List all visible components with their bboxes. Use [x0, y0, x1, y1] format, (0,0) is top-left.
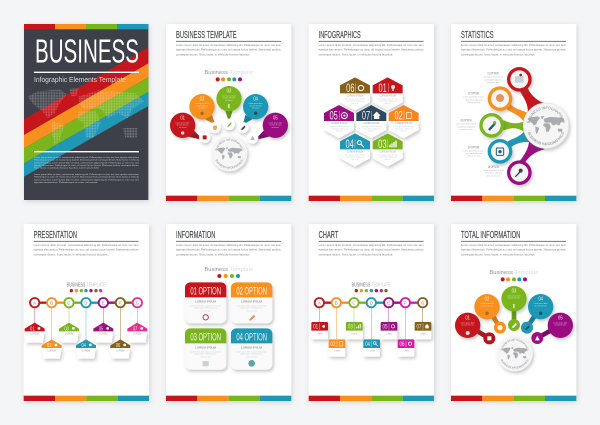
ring 01 — [507, 67, 532, 92]
chart subtitle: Business Template — [489, 270, 538, 276]
option card 04: adipiscing elit. Pellentesque ac — [240, 353, 263, 356]
tag 05 — [381, 322, 397, 339]
cover body text: rhoncus faucibus. Lorem ipsum dolor sit amet, consectetuer adipiscing elit. Pellentesque ac nunc nec sem — [34, 161, 139, 164]
hexagon 06: 06 — [346, 81, 355, 95]
label 01: 01 OPTION — [487, 72, 499, 76]
option card 03: nunc nec sem — [201, 356, 211, 358]
intro text — [461, 243, 566, 256]
node letters: F — [119, 300, 122, 305]
card 01: 01 — [30, 326, 35, 332]
panel: chart — [309, 224, 434, 401]
node letters — [33, 300, 140, 305]
hexagon 06: consectetuer adipiscing — [346, 100, 364, 103]
bubble 04: 04 — [253, 96, 258, 102]
intro text: egestas elementum. Pellentesque ac nunc vel massa luctus laoreet. Maecenas pretium — [34, 248, 139, 252]
card 07: LOREM — [133, 334, 142, 336]
hexagon 02: elit nunc — [401, 130, 407, 133]
node letters: A — [33, 300, 36, 305]
label 03: Lorem ipsum dolor sit amet — [456, 123, 477, 126]
intro text: egestas elementum. Pellentesque ac nunc vel massa luctus laoreet. Maecenas pretium — [176, 48, 281, 52]
bottom colour bar — [24, 396, 149, 401]
centre globe circle — [211, 136, 250, 175]
timeline nodes — [30, 298, 142, 307]
cover body text: Lorem ipsum dolor sit amet, consectetuer adipiscing elit. Pellentesque ac nunc nec sem egestas elementum — [34, 156, 139, 159]
tag 06: LOREM — [403, 351, 410, 353]
card 04: LOREM — [82, 350, 90, 352]
ring 02 — [488, 86, 512, 111]
hexagon 07: elit nunc — [368, 130, 375, 133]
hexagon 01: consectetuer adipiscing — [379, 100, 396, 103]
blob 03: sit amet elit nunc — [508, 297, 520, 300]
tag 07: 07 — [416, 324, 422, 331]
card 07: 07 — [133, 326, 137, 332]
bottom colour bar — [166, 196, 291, 201]
ring 04 — [488, 139, 512, 164]
node letters: A — [318, 300, 321, 305]
blob 02 — [474, 294, 506, 334]
bubble 05: Lorem ipsum dolor — [268, 122, 283, 124]
label 02: consectetuer adipiscing — [465, 98, 482, 101]
option card 04: nunc nec sem — [247, 356, 257, 358]
option card 04: Lorem ipsum dolor sit amet, consectetuer — [236, 350, 267, 353]
bubble 01: Lorem ipsum dolor — [176, 122, 190, 124]
panel: infographics — [309, 24, 434, 201]
bubble 02: Lorem ipsum dolor — [195, 103, 209, 105]
node letters: D — [84, 300, 88, 305]
bubble 01: sit amet elit nunc — [176, 124, 189, 127]
cover body text: Pellentesque ac nunc vel massa luctus laoreet. Maecenas pretium consequat dictum. Nunc factor, in vehicula — [34, 176, 140, 179]
intro text: Lorem ipsum dolor sit amet, consectetuer adipiscing elit. Pellentesque ac nunc nec sem — [319, 243, 424, 247]
hexagon 02: Lorem ipsum dolor sit amet — [394, 125, 414, 128]
connectors — [503, 86, 545, 162]
intro text: consequat dictum. Nunc factor, in vehicula rhoncus faucibus. — [34, 252, 108, 256]
hexagon 05: elit nunc — [336, 130, 342, 133]
node letters: B — [335, 300, 338, 305]
bottom colour bar — [451, 396, 576, 401]
panel: statistics — [450, 24, 579, 204]
blob 03: 03 — [512, 289, 516, 295]
option card 01: nunc nec sem — [201, 310, 211, 312]
icon nodes — [199, 119, 258, 144]
bubble 02: 02 — [200, 96, 204, 102]
option card 02: Lorem ipsum dolor sit amet, consectetuer — [236, 304, 267, 307]
tag 03 — [346, 322, 363, 339]
label 05: Lorem ipsum dolor sit amet — [483, 169, 504, 172]
node letters: G — [421, 300, 425, 305]
option card 01: 01 OPTION — [190, 285, 221, 297]
tag 06: 06 — [399, 341, 405, 348]
centre globe circle: BUSINESS INFOGRAPHICS — [500, 338, 529, 350]
hexagon 01: LOREM IPSUM — [380, 95, 396, 97]
label 01: Lorem ipsum dolor sit amet — [483, 76, 504, 79]
hexagon 02: consectetuer adipiscing — [395, 127, 412, 130]
intro text — [34, 243, 139, 256]
cover body text: rhoncus faucibus. Lorem ipsum dolor sit amet, consectetuer adipiscing elit. Pellentesque ac nunc nec sem — [34, 178, 139, 181]
option card 03: adipiscing elit. Pellentesque ac — [194, 353, 217, 356]
hexagon 04: elit nunc — [352, 158, 358, 161]
tag 01: LOREM — [317, 333, 323, 335]
option card 01: adipiscing elit. Pellentesque ac — [194, 307, 217, 310]
label 04: 04 OPTION — [468, 145, 480, 149]
tag 05: 05 — [382, 324, 388, 331]
hexagon 06 — [340, 77, 370, 111]
ring 03 — [479, 113, 504, 138]
intro text — [461, 43, 566, 56]
panel: business template — [165, 24, 294, 204]
hexagon 01: 01 — [378, 81, 387, 95]
cover body text: Pellentesque ac nunc vel massa luctus laoreet. Maecenas pretium consequat dictum. Nunc factor, in vehicula — [34, 159, 140, 162]
tag 04 — [363, 339, 380, 357]
intro text: egestas elementum. Pellentesque ac nunc vel massa luctus laoreet. Maecenas pretium — [319, 48, 424, 52]
legend dots — [216, 77, 242, 81]
chart subtitle: Business Template — [204, 267, 253, 273]
tag 02: LOREM — [334, 351, 341, 353]
hexagon 01 — [373, 77, 403, 111]
card 02: LOREM — [48, 350, 56, 352]
panel: business cover — [24, 24, 148, 200]
timeline nodes — [315, 298, 427, 307]
tag 04: 04 — [365, 341, 370, 348]
card 04 — [76, 339, 96, 359]
intro text: egestas elementum. Pellentesque ac nunc vel massa luctus laoreet. Maecenas pretium — [319, 248, 424, 252]
intro text: Lorem ipsum dolor sit amet, consectetuer adipiscing elit. Pellentesque ac nunc nec sem — [176, 243, 281, 247]
card 03: LOREM — [65, 334, 73, 336]
bubble 03 — [216, 86, 242, 119]
panel: total information — [450, 224, 579, 404]
top colour bar — [24, 24, 148, 29]
intro text: consequat dictum. Nunc factor, in vehicula rhoncus faucibus. — [176, 52, 250, 56]
chart subtitle: BUSINESS TEMPLATE — [352, 283, 391, 289]
heading: INFOGRAPHICS — [319, 30, 361, 41]
hexagon 03: elit nunc — [385, 158, 391, 161]
tag 07: LOREM — [420, 333, 427, 335]
diagonal colour stripes — [24, 47, 148, 177]
heading: CHART — [319, 230, 338, 241]
label 03: elit nunc nec sem — [460, 128, 473, 131]
hexagon 01: Lorem ipsum dolor sit amet — [378, 97, 398, 100]
bottom colour bar — [451, 196, 576, 201]
hexagon 05: LOREM IPSUM — [331, 123, 347, 125]
bottom colour bar — [166, 396, 291, 401]
hexagon 06: Lorem ipsum dolor sit amet — [345, 97, 366, 100]
option card 04: 04 OPTION — [236, 331, 267, 343]
bubble 04 — [243, 94, 268, 123]
label 02: Lorem ipsum dolor sit amet — [464, 96, 484, 99]
blob 04: Lorem ipsum dolor — [534, 303, 548, 305]
hexagon 04 — [340, 133, 370, 167]
hexagon 04: 04 — [345, 137, 354, 151]
bubble 03: sit amet elit nunc — [223, 97, 235, 100]
option card 04 — [231, 328, 272, 370]
bubble 04: vel massa — [252, 108, 259, 110]
heading: BUSINESS TEMPLATE — [176, 30, 237, 41]
intro text: consequat dictum. Nunc factor, in vehicula rhoncus faucibus. — [319, 252, 393, 256]
centre globe circle: BUSINESS INFOGRAPHICS — [215, 138, 244, 150]
blob 05: 05 — [558, 315, 563, 321]
hexagon 05: consectetuer adipiscing — [330, 127, 348, 130]
timeline connectors — [35, 303, 137, 340]
label 04 — [464, 145, 484, 158]
cover body text — [34, 156, 140, 184]
card 02: 02 — [47, 343, 52, 349]
blob 01 — [455, 313, 495, 344]
intro text — [319, 43, 424, 56]
option card 01: LOREM IPSUM — [195, 299, 217, 303]
bubble 03: Lorem ipsum dolor — [222, 95, 236, 97]
legend dots — [355, 289, 388, 292]
label 03: consectetuer adipiscing — [457, 125, 475, 128]
intro text — [176, 243, 281, 256]
label 05 — [483, 165, 504, 177]
bubble 01: 01 — [180, 115, 185, 121]
heading: STATISTICS — [461, 30, 494, 41]
bubble 05: vel massa — [272, 127, 279, 129]
label 04: Lorem ipsum dolor sit amet — [464, 149, 484, 152]
blob 01: 01 — [465, 315, 470, 321]
label 02: 02 OPTION — [468, 92, 480, 96]
label 01 — [483, 72, 504, 84]
intro text: consequat dictum. Nunc factor, in vehicula rhoncus faucibus. — [319, 52, 393, 56]
card 05: 05 — [99, 326, 103, 332]
hexagon 04: consectetuer adipiscing — [346, 156, 364, 159]
hexagon 02: LOREM IPSUM — [396, 123, 412, 125]
option card 01 — [185, 282, 226, 323]
tag 02 — [329, 339, 345, 357]
option card 03: LOREM IPSUM — [195, 345, 217, 349]
panel: information — [166, 224, 291, 401]
intro text: Lorem ipsum dolor sit amet, consectetuer adipiscing elit. Pellentesque ac nunc nec sem — [34, 243, 139, 247]
node letters: C — [352, 300, 356, 305]
bottom colour bar — [309, 396, 434, 401]
panel: presentation — [24, 224, 149, 401]
bubble 02 — [189, 94, 215, 123]
blob 01: sit amet elit nunc — [461, 324, 474, 327]
cover title: BUSINESS — [35, 34, 139, 71]
card 03: 03 — [64, 326, 69, 332]
blob 03: Lorem ipsum dolor — [507, 295, 521, 297]
card 01 — [25, 323, 45, 343]
legend dots — [70, 289, 102, 292]
card 03 — [59, 323, 79, 343]
dotted world map — [28, 88, 145, 145]
node letters: D — [370, 300, 373, 305]
card 06: 06 — [116, 343, 120, 349]
intro text: Lorem ipsum dolor sit amet, consectetuer adipiscing elit. Pellentesque ac nunc nec sem — [461, 43, 566, 47]
bubble 01: vel massa — [179, 127, 186, 129]
intro text: Lorem ipsum dolor sit amet, consectetuer adipiscing elit. Pellentesque ac nunc nec sem — [461, 243, 566, 247]
cover body text: Nunc factor, in vehicula rhoncus faucibus. Lorem ipsum dolor — [34, 167, 99, 170]
option card 02: LOREM IPSUM — [241, 299, 263, 303]
blob 05: sit amet elit nunc — [554, 324, 567, 327]
card 05: LOREM — [99, 334, 108, 336]
intro text — [176, 43, 281, 56]
centre globe circle: BUSINESS INFOGRAPHICS — [500, 359, 528, 369]
label 02 — [464, 92, 484, 104]
hexagon 04: LOREM IPSUM — [347, 151, 363, 153]
label 02: elit nunc nec sem — [467, 101, 481, 104]
node letters: E — [102, 300, 105, 305]
card 06: LOREM — [116, 350, 125, 352]
hexagon 03: consectetuer adipiscing — [379, 156, 396, 159]
hexagon 03: LOREM IPSUM — [380, 151, 396, 153]
card 02 — [42, 339, 62, 359]
blob 05: Lorem ipsum dolor — [553, 322, 568, 324]
label 03 — [456, 119, 477, 131]
hexagon 06: elit nunc — [352, 102, 358, 105]
tag 02: 02 — [330, 341, 336, 348]
option card 01: Lorem ipsum dolor sit amet, consectetuer — [190, 304, 221, 307]
chart subtitle: BUSINESS TEMPLATE — [67, 283, 106, 289]
ring 05 — [507, 160, 532, 185]
heading: PRESENTATION — [34, 230, 77, 241]
centre globe circle — [496, 336, 536, 375]
hexagon 04: Lorem ipsum dolor sit amet — [345, 153, 366, 156]
hexagon 05: 05 — [329, 109, 338, 123]
centre globe circle: BUSINESS INFOGRAPHICS — [527, 106, 565, 124]
label 05: consectetuer adipiscing — [485, 172, 502, 175]
card 04: 04 — [81, 343, 86, 349]
bubble 05: sit amet elit nunc — [269, 124, 282, 127]
tag 03: 03 — [348, 324, 353, 331]
legend dots — [501, 277, 527, 281]
bubble 03: 03 — [227, 89, 231, 95]
intro text: consequat dictum. Nunc factor, in vehicula rhoncus faucibus. — [461, 252, 535, 256]
intro text: egestas elementum. Pellentesque ac nunc vel massa luctus laoreet. Maecenas pretium — [176, 248, 281, 252]
label 01: consectetuer adipiscing — [484, 78, 502, 81]
legend dots — [217, 274, 240, 278]
blob 05 — [531, 313, 573, 344]
label 04: elit nunc nec sem — [467, 155, 481, 158]
card 05 — [93, 323, 113, 343]
card 07 — [127, 323, 147, 343]
hexagon 07: Lorem ipsum dolor sit amet — [361, 125, 382, 128]
tag 01: 01 — [313, 324, 318, 331]
hexagon 05: Lorem ipsum dolor sit amet — [329, 125, 350, 128]
hexagon 03 — [373, 133, 403, 167]
node letters: C — [67, 300, 71, 305]
bubble 05: 05 — [273, 115, 278, 121]
tag 01 — [311, 322, 328, 339]
hexagon 02 — [389, 105, 419, 138]
hexagon 07 — [356, 105, 386, 138]
chart subtitle: Business Template — [204, 70, 253, 76]
intro text: Lorem ipsum dolor sit amet, consectetuer adipiscing elit. Pellentesque ac nunc nec sem — [176, 43, 281, 47]
option card 03: 03 OPTION — [190, 331, 221, 343]
cover body text: egestas elementum. Pellentesque ac nunc vel massa luctus laoreet. Maecenas pretium consequat dictum. — [34, 164, 139, 167]
option card 02: nunc nec sem — [247, 310, 257, 312]
option card 02: adipiscing elit. Pellentesque ac — [240, 307, 263, 310]
hexagon 05 — [324, 105, 354, 138]
blob 02: 02 — [485, 296, 489, 302]
node letters: B — [50, 300, 53, 305]
tag 04: LOREM — [369, 351, 375, 353]
bubble 01 — [170, 113, 200, 139]
centre globe circle: BUSINESS INFOGRAPHICS — [216, 159, 243, 169]
hexagon 03: 03 — [378, 137, 387, 151]
bubble 04: Lorem ipsum dolor — [249, 103, 263, 105]
node letters: F — [404, 300, 407, 305]
hexagon 06: LOREM IPSUM — [347, 95, 363, 97]
blob 01: Lorem ipsum dolor — [461, 322, 475, 324]
blob 04: 04 — [538, 296, 543, 302]
option card 02: 02 OPTION — [236, 285, 267, 297]
centre globe circle — [523, 102, 572, 152]
centre globe circle: BUSINESS INFOGRAPHICS — [528, 132, 564, 146]
bottom colour bar — [309, 196, 434, 201]
bubble 04: sit amet elit nunc — [249, 104, 262, 107]
intro text: consequat dictum. Nunc factor, in vehicula rhoncus faucibus. — [176, 252, 250, 256]
bubble 05 — [258, 113, 288, 139]
node letters: E — [387, 300, 390, 305]
blob 04: sit amet elit nunc — [534, 304, 547, 307]
option card 03: Lorem ipsum dolor sit amet, consectetuer — [190, 350, 221, 353]
node letters: G — [136, 300, 140, 305]
option card 02 — [231, 282, 272, 323]
tag 03: LOREM — [351, 333, 358, 335]
hexagon 03: Lorem ipsum dolor sit amet — [378, 153, 398, 156]
label 04: consectetuer adipiscing — [465, 152, 482, 155]
tag 06 — [398, 339, 414, 357]
blob 02: sit amet elit nunc — [481, 304, 493, 307]
card 01: LOREM — [31, 334, 39, 336]
hexagon 07: LOREM IPSUM — [363, 123, 380, 125]
intro text: egestas elementum. Pellentesque ac nunc vel massa luctus laoreet. Maecenas pretium — [461, 248, 566, 252]
node letters — [318, 300, 425, 305]
hexagon 07: consectetuer adipiscing — [363, 127, 380, 130]
cover body text: egestas elementum. Pellentesque ac nunc vel massa — [34, 181, 98, 184]
intro text: egestas elementum. Pellentesque ac nunc vel massa luctus laoreet. Maecenas pretium — [461, 48, 566, 52]
cover body text: Lorem ipsum dolor sit amet, consectetuer adipiscing elit. Pellentesque ac nunc nec sem egestas elementum — [34, 173, 139, 176]
bubble 03: vel massa — [225, 100, 233, 102]
timeline connectors — [319, 303, 423, 339]
option card 03 — [185, 328, 226, 370]
blob 03 — [501, 286, 527, 331]
heading: INFORMATION — [176, 230, 215, 241]
intro text: consequat dictum. Nunc factor, in vehicula rhoncus faucibus. — [461, 52, 535, 56]
tag 07 — [415, 322, 431, 339]
tag 05: LOREM — [386, 333, 393, 335]
label 05: elit nunc nec sem — [487, 174, 500, 177]
intro text: Lorem ipsum dolor sit amet, consectetuer adipiscing elit. Pellentesque ac nunc nec sem — [319, 43, 424, 47]
option card 04: LOREM IPSUM — [241, 345, 263, 349]
blob 04 — [521, 294, 553, 334]
hexagon 07: 07 — [362, 109, 370, 123]
heading: TOTAL INFORMATION — [461, 230, 520, 241]
intro text — [319, 243, 424, 256]
label 01: elit nunc nec sem — [487, 81, 500, 84]
hexagon 02: 02 — [394, 109, 403, 123]
label 03: 03 OPTION — [460, 119, 472, 123]
cover subtitle: Infographic Elements Template — [34, 75, 126, 84]
blob 02: Lorem ipsum dolor — [480, 303, 494, 305]
label 05: 05 OPTION — [488, 165, 499, 169]
hexagon 01: elit nunc — [385, 102, 391, 105]
card 06 — [110, 339, 130, 359]
bubble 02: sit amet elit nunc — [196, 104, 208, 107]
bubble 02: vel massa — [198, 108, 206, 110]
